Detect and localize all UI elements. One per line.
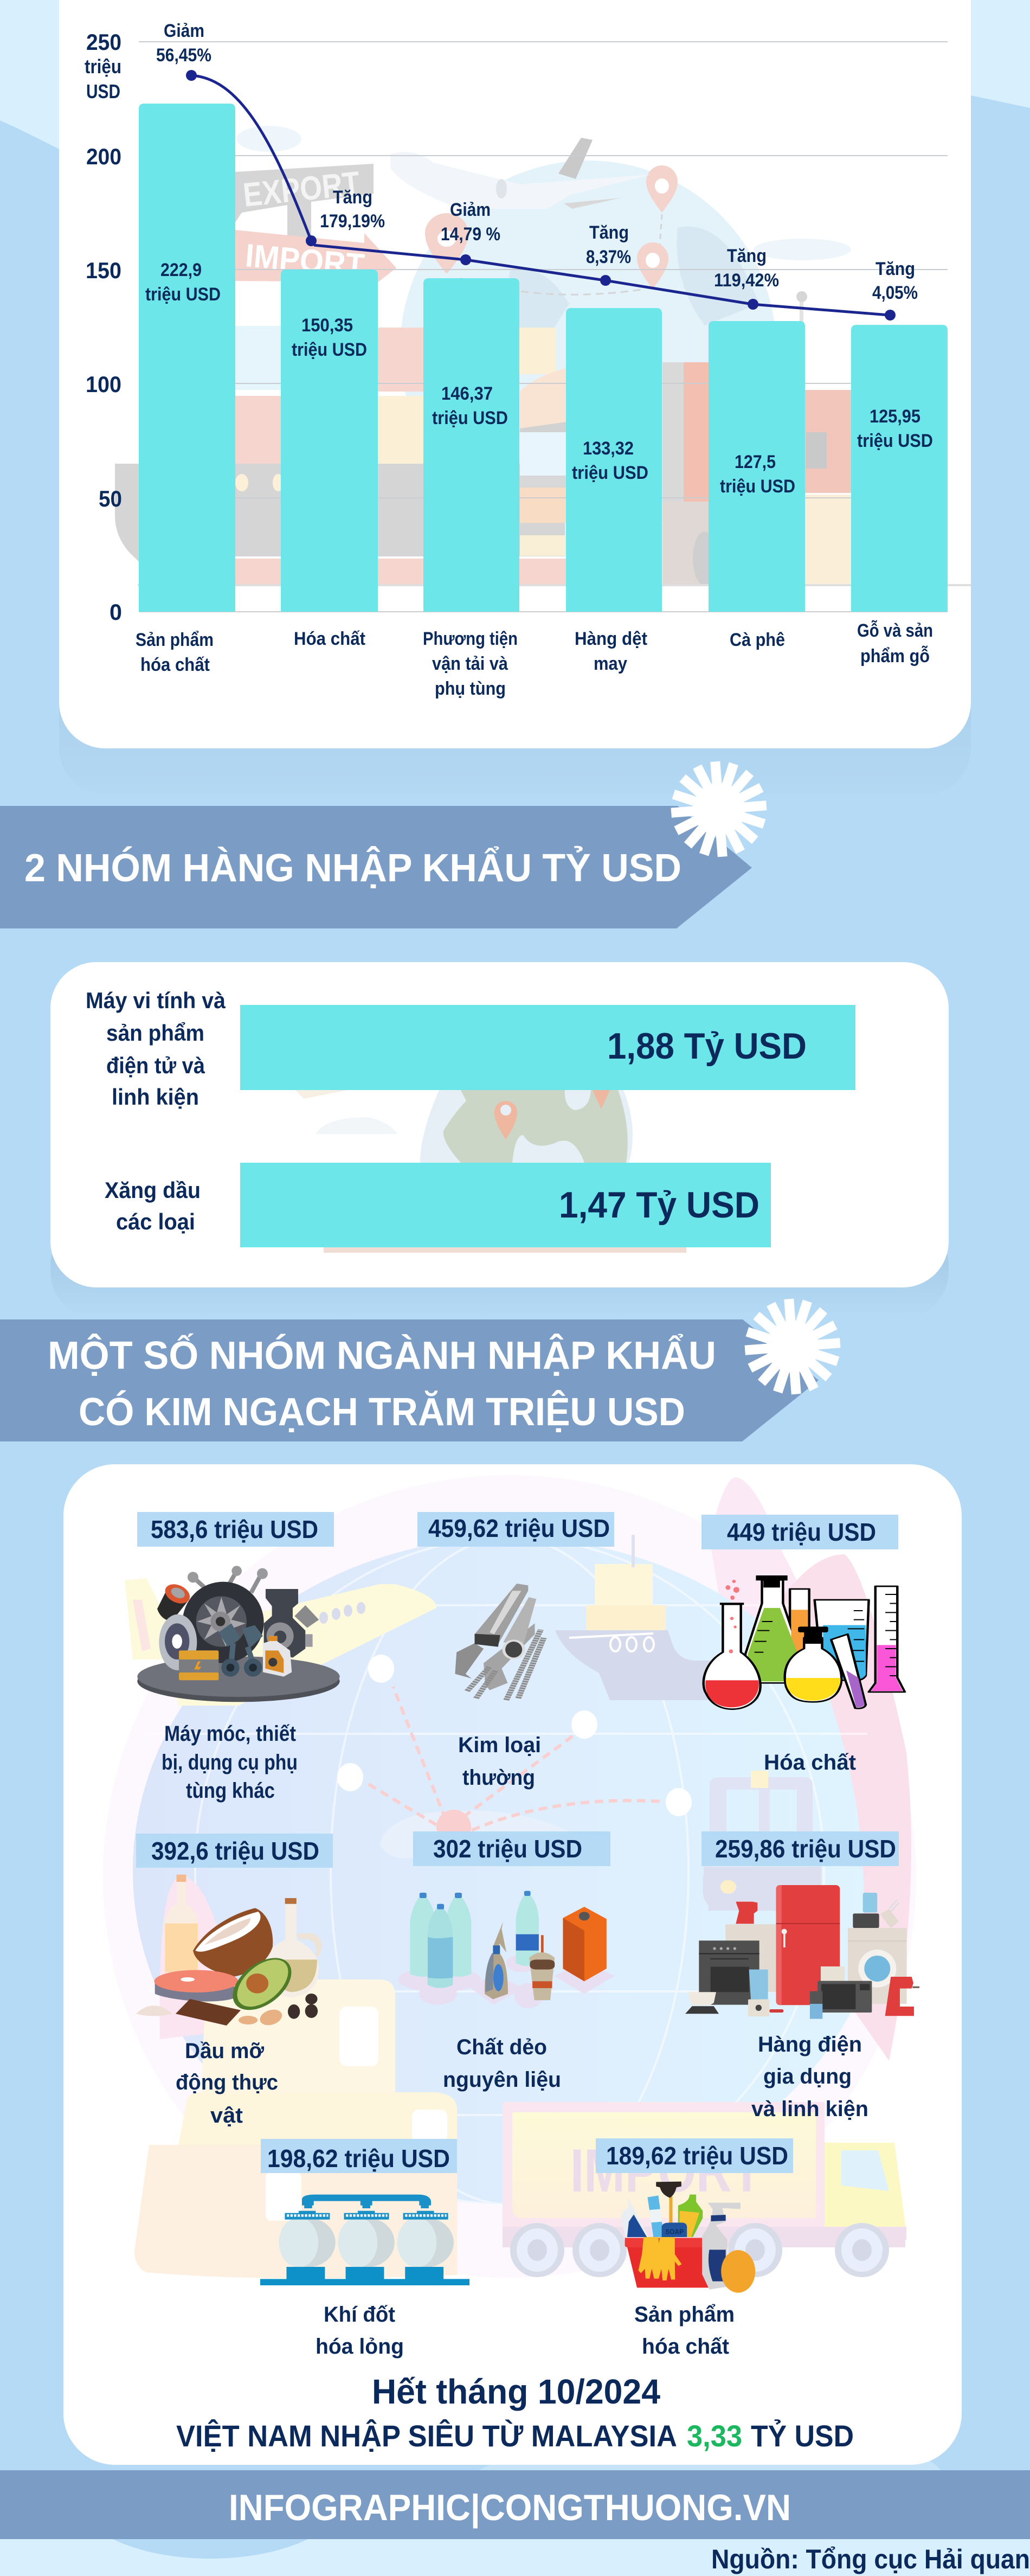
- caption: và linh kiện: [751, 2097, 868, 2121]
- category labels: phụ tùng: [435, 678, 506, 699]
- icon: sunburst: [742, 1296, 844, 1398]
- percent change labels: 14,79 %: [441, 224, 500, 245]
- item: home appliances: 259,86 triệu USD: [715, 1835, 896, 1863]
- caption: Hàng điện: [758, 2033, 862, 2056]
- bar value labels: 150,35: [301, 315, 353, 336]
- y axis labels: 250: [86, 29, 121, 55]
- item: machinery: [137, 1512, 340, 1803]
- percent change labels: 8,37%: [586, 247, 631, 267]
- heading banner: 2 groups: [0, 806, 752, 928]
- caption: Khí đốt: [324, 2303, 395, 2327]
- caption: Chất dẻo: [456, 2035, 547, 2059]
- percent change labels: Tăng: [589, 222, 629, 243]
- percent change labels: 179,19%: [320, 211, 385, 232]
- bar value labels: triệu USD: [145, 284, 221, 305]
- bar value labels: [145, 260, 933, 497]
- category labels: vận tải và: [432, 653, 508, 674]
- bar value labels: triệu USD: [292, 339, 367, 360]
- y axis labels: triệu: [85, 55, 121, 78]
- icon: cleaning bucket: SOAP: [665, 2228, 684, 2236]
- summary trade deficit: TỶ USD: [751, 2419, 854, 2453]
- item: liquefied gas: [260, 2139, 469, 2359]
- label: computers: điện tử và: [106, 1053, 205, 1078]
- caption: Máy móc, thiết: [164, 1722, 296, 1746]
- caption: [162, 1722, 298, 1803]
- item: home appliances: [685, 1831, 919, 2121]
- item: machinery: 583,6 triệu USD: [151, 1515, 318, 1543]
- percent change labels: Tăng: [333, 187, 372, 208]
- percent change labels: Giảm: [164, 21, 204, 41]
- chart background illustration: [115, 126, 971, 586]
- icon: gas tanks: [260, 2198, 469, 2285]
- item: plastics: 302 triệu USD: [433, 1835, 582, 1863]
- caption: hóa chất: [642, 2335, 729, 2359]
- bar: petroleum: [240, 1163, 771, 1247]
- caption: Dầu mỡ: [185, 2039, 265, 2063]
- item: chemical products: 189,62 triệu USD: [606, 2142, 788, 2170]
- bars: [139, 104, 948, 612]
- caption: vật: [210, 2104, 243, 2128]
- caption: Sản phẩm: [634, 2303, 735, 2327]
- category labels: hóa chất: [140, 655, 210, 675]
- item: chemicals: 449 triệu USD: [727, 1518, 876, 1546]
- summary trade deficit: 3,33: [687, 2419, 742, 2453]
- bar value labels: triệu USD: [572, 463, 648, 483]
- caption: [751, 2033, 868, 2121]
- value: 1.47: 1,47 Tỷ USD: [559, 1184, 759, 1226]
- percent change labels: 119,42%: [714, 270, 779, 291]
- summary trade deficit: VIỆT NAM NHẬP SIÊU TỪ MALAYSIA: [176, 2419, 677, 2453]
- caption: [458, 1733, 541, 1790]
- category labels: may: [594, 653, 627, 674]
- y axis labels: 150: [86, 258, 121, 283]
- percent change labels: Tăng: [876, 259, 915, 279]
- gridlines: [139, 42, 948, 612]
- label: computers: [86, 988, 226, 1110]
- item: chemical products: [596, 2138, 793, 2359]
- caption: bị, dụng cụ phụ: [162, 1751, 298, 1774]
- bar value labels: 133,32: [583, 438, 634, 459]
- heading banner: hundred-million groups: CÓ KIM NGẠCH TRĂM TRIỆU USD: [79, 1390, 685, 1434]
- caption: [316, 2303, 404, 2359]
- bar value labels: triệu USD: [720, 476, 795, 497]
- faded background illustration: IMPORT: [570, 2137, 762, 2205]
- y axis labels: 100: [86, 371, 121, 397]
- faded background illustration: [103, 1475, 916, 2278]
- caption: hóa lỏng: [316, 2335, 404, 2359]
- chart background illustration: IMPORT: [244, 237, 366, 284]
- item: oils and fats: 392,6 triệu USD: [151, 1837, 319, 1865]
- category labels: phẩm gỗ: [860, 646, 930, 667]
- percent change labels: [156, 21, 918, 303]
- value: 1.88: 1,88 Tỷ USD: [607, 1026, 807, 1067]
- bar value labels: 222,9: [160, 260, 202, 280]
- footer band: [0, 2470, 1030, 2539]
- caption: thường: [462, 1766, 535, 1790]
- faded globe illustration: [295, 1090, 686, 1253]
- y axis labels: 50: [99, 486, 122, 511]
- caption: Kim loại: [458, 1733, 541, 1757]
- y axis labels: 200: [86, 144, 121, 169]
- caption: nguyên liệu: [443, 2068, 561, 2092]
- item: plastics: [398, 1831, 615, 2092]
- bar: computers: [240, 1005, 855, 1090]
- category labels: [136, 620, 933, 699]
- bar value labels: triệu USD: [857, 431, 933, 451]
- percent change labels: 56,45%: [156, 45, 211, 66]
- caption: động thực: [176, 2071, 278, 2094]
- category labels: Hóa chất: [294, 629, 365, 649]
- caption: [443, 2035, 561, 2092]
- panel: hundred-million import groups: [63, 1464, 962, 2465]
- heading banner: hundred-million groups: MỘT SỐ NHÓM NGÀNH NHẬP KHẨU: [48, 1333, 716, 1377]
- caption: [176, 2039, 278, 2128]
- category labels: Sản phẩm: [136, 630, 214, 650]
- icon: metal beams: [455, 1584, 544, 1700]
- bar value labels: triệu USD: [432, 408, 508, 428]
- icon: lab flasks: [704, 1575, 905, 1709]
- category labels: Hàng dệt: [575, 629, 647, 649]
- icon: plastic products: [398, 1891, 615, 2008]
- panel: chart card shadow: [59, 163, 971, 794]
- label: petroleum: các loại: [116, 1209, 195, 1234]
- caption: Hóa chất: [764, 1751, 856, 1774]
- icon: cleaning bucket: [621, 2182, 755, 2293]
- category labels: Cà phê: [730, 630, 785, 650]
- item: liquefied gas: 198,62 triệu USD: [267, 2144, 450, 2173]
- summary date: Hết tháng 10/2024: [372, 2372, 660, 2411]
- icon: appliances: [685, 1876, 919, 2019]
- category labels: Gỗ và sản: [857, 620, 933, 641]
- bar value labels: 127,5: [735, 452, 776, 472]
- bar value labels: 125,95: [870, 406, 920, 427]
- icon: food: [136, 1875, 322, 2027]
- trend line: [186, 70, 896, 321]
- label: petroleum: Xăng dầu: [105, 1177, 201, 1203]
- caption: gia dụng: [763, 2065, 852, 2088]
- percent change labels: 4,05%: [872, 283, 918, 303]
- label: computers: linh kiện: [112, 1084, 199, 1110]
- icon: sunburst: [668, 758, 770, 860]
- panel: export chart card: [59, 0, 971, 748]
- y axis labels: USD: [86, 80, 120, 102]
- y axis labels: 0: [110, 599, 122, 625]
- panel: card shadow: [50, 1220, 949, 1318]
- item: metals: 459,62 triệu USD: [428, 1514, 610, 1542]
- footer band: INFOGRAPHIC|CONGTHUONG.VN: [229, 2487, 791, 2529]
- heading banner: 2 groups: 2 NHÓM HÀNG NHẬP KHẨU TỶ USD: [24, 846, 681, 890]
- label: computers: sản phẩm: [106, 1020, 204, 1046]
- label: petroleum: [105, 1177, 201, 1234]
- caption: [634, 2303, 735, 2359]
- panel: billion-USD import groups: [50, 962, 949, 1287]
- item: chemicals: [701, 1515, 905, 1774]
- percent change labels: Tăng: [727, 246, 767, 266]
- chart background illustration: EXPORT: [241, 165, 362, 214]
- percent change labels: Giảm: [450, 200, 491, 220]
- label: computers: Máy vi tính và: [86, 988, 226, 1013]
- category labels: Phương tiện: [423, 629, 518, 649]
- heading banner: hundred-million groups: [0, 1319, 819, 1441]
- bar value labels: 146,37: [441, 383, 493, 404]
- icon: machine parts: [137, 1566, 340, 1702]
- caption: tùng khác: [186, 1779, 275, 1803]
- y axis labels: [85, 29, 122, 625]
- item: oils and fats: [136, 1834, 333, 2128]
- item: metals: [417, 1512, 614, 1790]
